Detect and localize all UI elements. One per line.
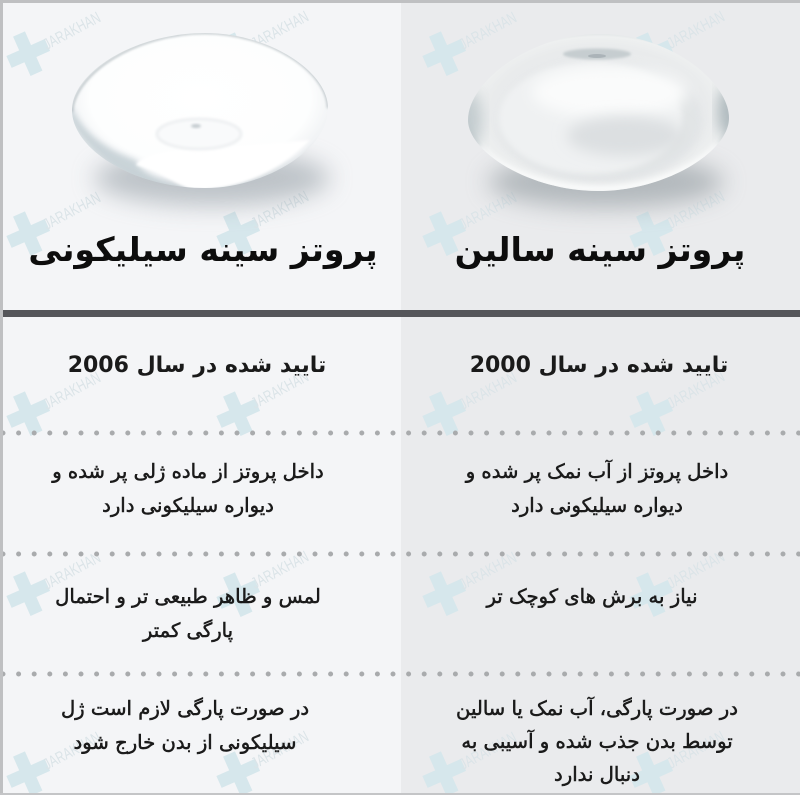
watermarks: JARAKHAN logo grid: JARAKHAN: [249, 728, 312, 773]
header divider bar: [3, 310, 800, 317]
text: silicone contents: داخل پروتز از ماده ژلی پر شده و: [52, 460, 324, 483]
watermarks: JARAKHAN logo grid: JARAKHAN: [41, 369, 104, 414]
text: saline rupture: دنبال ندارد: [554, 763, 640, 786]
watermarks: JARAKHAN logo grid: JARAKHAN: [665, 548, 728, 593]
watermarks: JARAKHAN logo grid: JARAKHAN: [457, 549, 520, 594]
watermarks: JARAKHAN logo grid: JARAKHAN: [41, 549, 104, 594]
text: silicone rupture: در صورت پارگی لازم است ژل: [61, 697, 309, 720]
approval year: saline: تایید شده در سال 2000: [470, 353, 728, 378]
panel: silicone column background: [0, 0, 401, 795]
text: saline rupture: در صورت پارگی، آب نمک یا سالین: [456, 697, 738, 720]
shadow: silicone: [94, 150, 330, 206]
text: saline incision: نیاز به برش های کوچک تر: [486, 585, 698, 608]
text: silicone contents: دیواره سیلیکونی دارد: [102, 494, 274, 517]
text: saline rupture: [456, 696, 738, 786]
text: saline contents: داخل پروتز از آب نمک پر شده و: [466, 460, 728, 483]
watermarks: JARAKHAN logo grid: JARAKHAN: [41, 189, 104, 234]
panel: saline column background: [401, 0, 800, 795]
text: saline contents: دیواره سیلیکونی دارد: [511, 494, 683, 517]
icon: implants: [72, 33, 730, 220]
watermarks: JARAKHAN logo grid: JARAKHAN: [41, 9, 104, 54]
watermarks: JARAKHAN logo grid: JARAKHAN: [41, 729, 104, 774]
approval year: silicone: تایید شده در سال 2006: [68, 353, 326, 378]
watermarks: JARAKHAN logo grid: JARAKHAN: [249, 548, 312, 593]
text: silicone feel: پارگی کمتر: [143, 619, 233, 642]
text: silicone feel: لمس و ظاهر طبیعی تر و احتمال: [55, 585, 321, 608]
watermarks: JARAKHAN logo grid: JARAKHAN: [457, 9, 520, 54]
frame border: top: [0, 0, 800, 3]
watermarks: JARAKHAN logo grid: JARAKHAN: [249, 188, 312, 233]
text: silicone rupture: [61, 697, 309, 754]
title: saline implant: پروتز سینه سالین: [455, 230, 745, 269]
frame border: bottom: [0, 793, 800, 795]
text: silicone rupture: سیلیکونی از بدن خارج شود: [74, 731, 296, 754]
watermarks: JARAKHAN logo grid: JARAKHAN: [665, 728, 728, 773]
shadow: saline: [488, 156, 724, 208]
text: silicone contents: [51, 460, 324, 518]
text: silicone feel: [55, 585, 321, 642]
watermarks: JARAKHAN logo grid: JARAKHAN: [665, 368, 728, 413]
watermarks: JARAKHAN logo grid: JARAKHAN: [457, 729, 520, 774]
text: saline contents: [464, 459, 728, 518]
frame border: left: [0, 0, 3, 795]
watermarks: JARAKHAN logo grid: JARAKHAN: [457, 189, 520, 234]
watermarks: JARAKHAN logo grid: JARAKHAN: [249, 368, 312, 413]
text: saline rupture: توسط بدن جذب شده و آسیبی به: [461, 730, 733, 753]
title: silicone implant: پروتز سینه سیلیکونی: [28, 230, 378, 269]
watermarks: JARAKHAN logo grid: JARAKHAN: [665, 188, 728, 233]
watermarks: JARAKHAN logo grid: JARAKHAN: [457, 369, 520, 414]
